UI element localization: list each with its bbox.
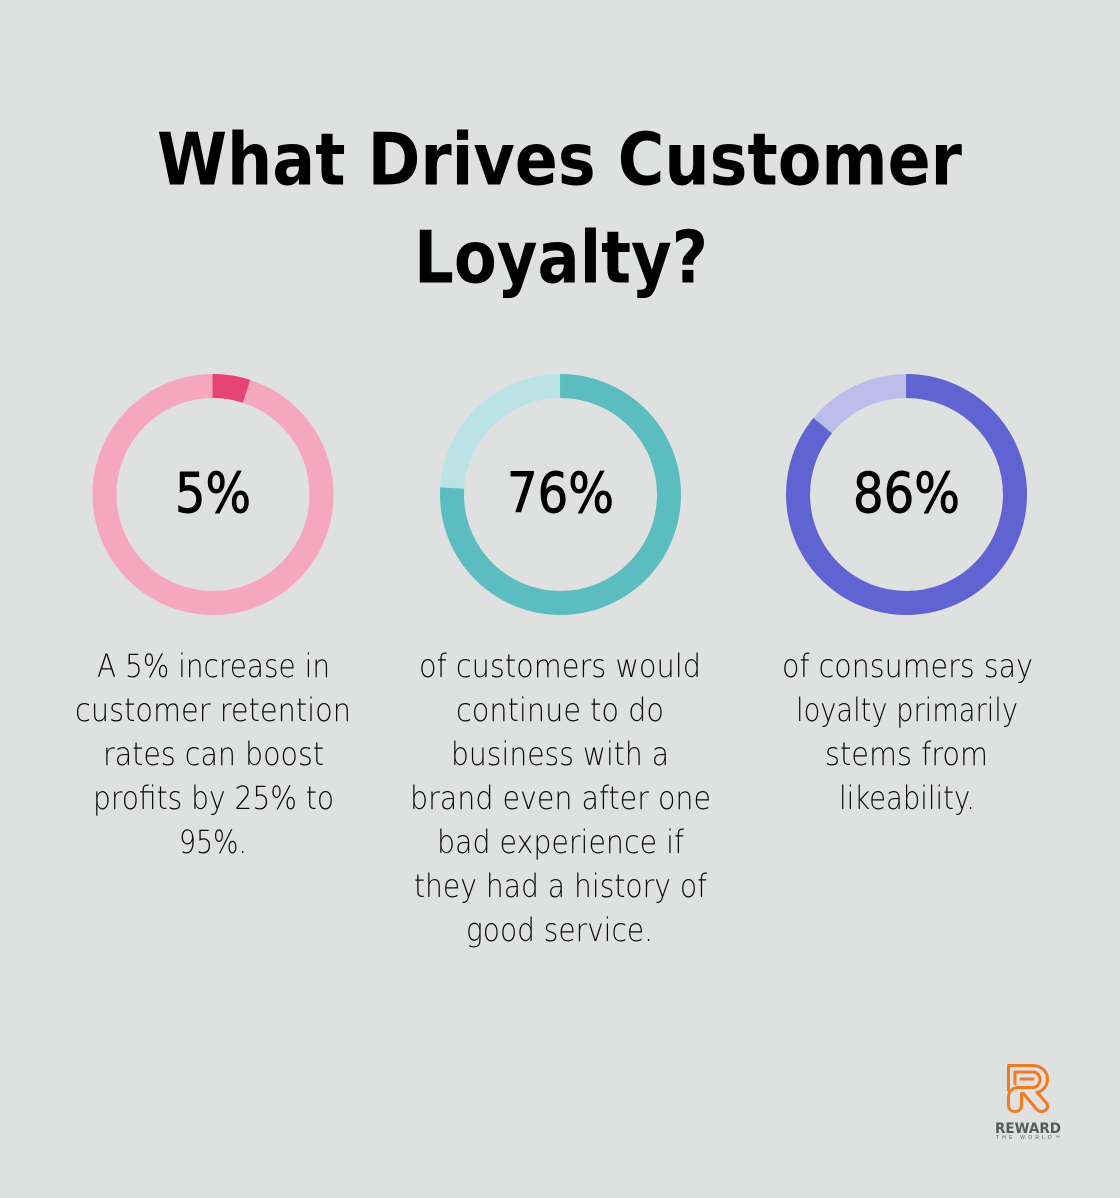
panel: 86% stat xyxy=(782,386,1033,817)
description: 76%: good service. xyxy=(466,911,653,949)
description: 86%: stems from xyxy=(825,735,988,773)
logo: Reward the World xyxy=(995,1066,1061,1141)
donut chart: 5% xyxy=(104,386,322,603)
stat value: 76%: 76% xyxy=(507,461,614,525)
description: 86%: of consumers say xyxy=(782,647,1033,685)
wordmark: REWARD xyxy=(995,1121,1061,1137)
description: 76%: business with a xyxy=(451,735,669,773)
description: 5% xyxy=(75,647,351,861)
description: 76%: they had a history of xyxy=(414,867,708,905)
title: What Drives Customer xyxy=(157,118,962,202)
description: 86%: loyalty primarily xyxy=(796,691,1018,729)
description: 5%: A 5% increase in xyxy=(97,647,330,685)
stat value: 5%: 5% xyxy=(175,461,251,525)
icon: orange R xyxy=(1008,1066,1048,1112)
donut chart: 86% xyxy=(798,386,1015,603)
panel: 5% stat xyxy=(75,386,351,861)
description: 76%: continue to do xyxy=(456,691,664,729)
donut chart: 76% xyxy=(452,386,669,603)
description: 76% xyxy=(410,647,711,949)
title xyxy=(157,118,962,300)
description: 86%: likeability. xyxy=(839,779,975,817)
description: 76%: bad experience if xyxy=(437,823,685,861)
stat value: 86%: 86% xyxy=(853,461,960,525)
description: 86% xyxy=(782,647,1033,817)
description: 5%: 95%. xyxy=(179,823,247,861)
description: 5%: profits by 25% to xyxy=(93,779,334,817)
description: 76%: brand even after one xyxy=(410,779,711,817)
description: 76%: of customers would xyxy=(419,647,701,685)
description: 5%: rates can boost xyxy=(103,735,324,773)
description: 5%: customer retention xyxy=(75,691,351,729)
title: Loyalty? xyxy=(414,216,708,300)
tagline: THE WORLD™ xyxy=(996,1135,1060,1141)
panel: 76% stat xyxy=(410,386,711,949)
